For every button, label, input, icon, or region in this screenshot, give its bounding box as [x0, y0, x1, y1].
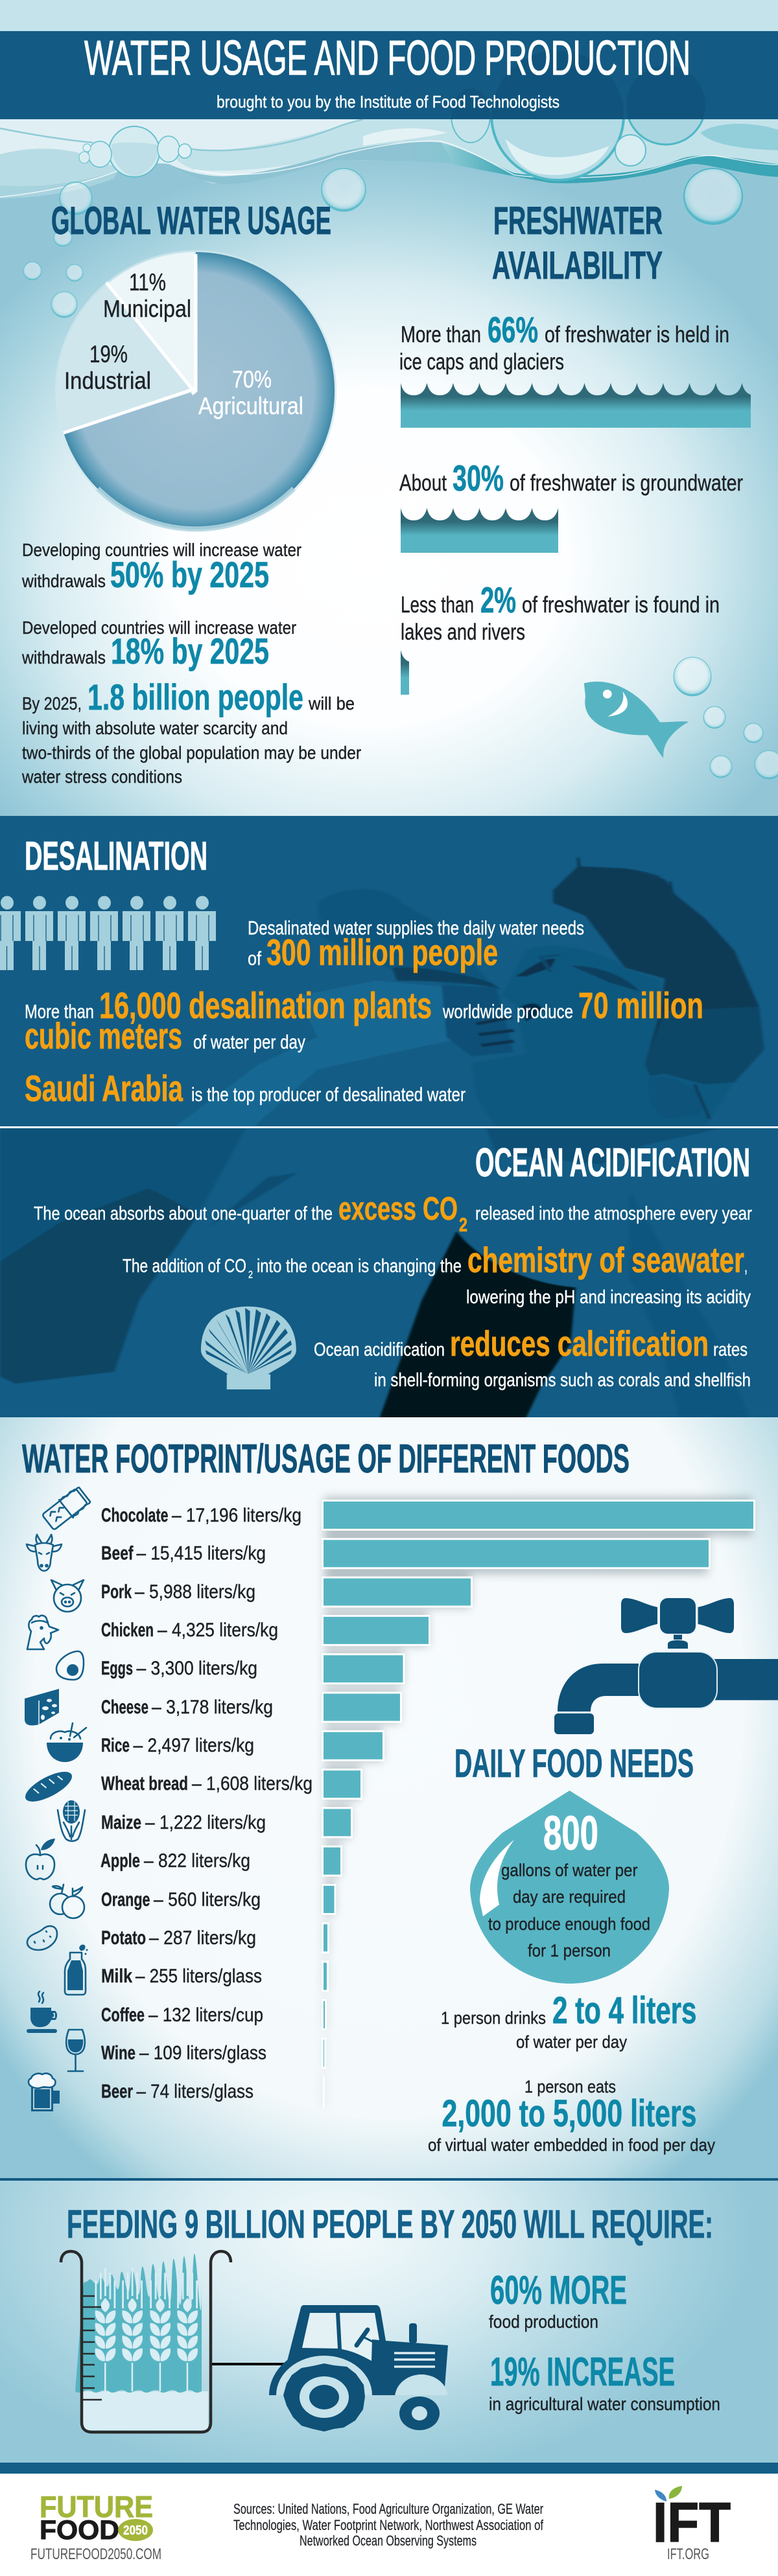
text: reduces calcification: Ocean acidification — [314, 1340, 445, 1360]
row: coffee — [27, 1991, 263, 2033]
text: 1.8 billion people: two-thirds of the global population may be under — [22, 743, 361, 763]
icon: pig — [51, 1580, 84, 1612]
heading: freshwater availability: AVAILABILITY — [492, 244, 663, 287]
tractor front wheel — [399, 2396, 440, 2430]
row: eggs: Eggs — [101, 1658, 133, 1679]
row: chocolate — [41, 1485, 301, 1532]
icon: chocolate — [41, 1485, 91, 1532]
text: excess CO2: excess CO — [338, 1190, 458, 1227]
text: 19 percent increase: in agricultural water consumption — [489, 2394, 720, 2414]
tractor rear wheel — [283, 2363, 365, 2431]
row: coffee: Coffee — [101, 2004, 145, 2026]
callout text: to produce enough food — [488, 1914, 650, 1934]
text: 2 percent: Less than — [401, 592, 474, 618]
text: 2 percent — [401, 579, 720, 645]
wave bar: 2 percent — [401, 650, 409, 695]
row: rice: – 2,497 liters/kg — [134, 1735, 254, 1756]
row: cheese — [25, 1689, 273, 1725]
text: excess CO2: 2 — [459, 1214, 467, 1236]
row: chicken: Chicken — [101, 1619, 154, 1641]
text: 1.8 billion people: 1.8 billion people — [88, 677, 303, 717]
header band — [0, 31, 778, 119]
icon: beer mug — [29, 2073, 60, 2111]
text: reduces calcification: rates — [713, 1340, 748, 1360]
row: potato: – 287 liters/kg — [149, 1927, 256, 1949]
icon: fish — [584, 682, 689, 758]
row: beef — [27, 1535, 266, 1571]
icon: potato — [27, 1926, 57, 1950]
text: 16,000 desalination plants: worldwide produce — [442, 1001, 573, 1023]
row: milk: – 255 liters/glass — [136, 1966, 262, 1987]
row: wine: Wine — [101, 2043, 136, 2063]
icon: row of people — [0, 896, 216, 970]
text: chemistry of seawater: into the ocean is changing the — [257, 1256, 462, 1277]
row: pork: – 5,988 liters/kg — [135, 1581, 255, 1603]
icon: cheese — [25, 1689, 59, 1725]
text: saudi arabia: is the top producer of desalinated water — [191, 1084, 466, 1106]
icon: wine glass — [66, 2030, 85, 2071]
text: developed countries: Developed countries will increase water — [22, 618, 296, 638]
sources: Technologies, Water Footprint Network, Northwest Association of — [233, 2517, 544, 2533]
text: chemistry of seawater: 2 — [248, 1270, 253, 1281]
row: coffee: – 132 liters/cup — [148, 2004, 263, 2026]
callout text: for 1 person — [528, 1941, 611, 1960]
row: eggs — [56, 1651, 257, 1680]
text: saudi arabia: Saudi Arabia — [25, 1068, 183, 1109]
text: chemistry of seawater: The addition of CO — [123, 1256, 246, 1277]
text: 300 million people: Desalinated water supplies the daily water needs — [248, 918, 584, 939]
callout number: 800 — [543, 1806, 598, 1860]
text: 16,000 desalination plants: 16,000 desalination plants — [99, 985, 432, 1027]
row: beer: Beer — [101, 2081, 133, 2102]
text: 66 percent: More than — [401, 322, 481, 347]
text: 2,000 to 5,000 liters — [428, 2077, 715, 2155]
row: maize: Maize — [101, 1812, 141, 1833]
text: 2 to 4 liters — [441, 1990, 696, 2052]
row: maize: – 1,222 liters/kg — [145, 1812, 266, 1833]
bubbles — [23, 51, 778, 779]
text: 1.8 billion people: By 2025, — [22, 693, 82, 714]
text: 300 million people: 300 million people — [266, 932, 498, 973]
text: 2 percent: lakes and rivers — [401, 620, 525, 645]
label: agricultural — [198, 366, 303, 419]
row: chocolate: Chocolate — [101, 1505, 169, 1526]
row: wheat bread: – 1,608 liters/kg — [192, 1773, 312, 1794]
text: excess CO2: The ocean absorbs about one-quarter of the — [34, 1203, 333, 1224]
label: industrial — [64, 341, 151, 394]
row: rice — [47, 1723, 254, 1762]
text: developing countries: Developing countries will increase water — [22, 540, 301, 560]
row: orange: – 560 liters/kg — [154, 1889, 261, 1910]
icon: bread — [21, 1766, 76, 1807]
panel: water footprint and daily food needs — [0, 1417, 778, 2178]
text: 19 percent increase — [489, 2350, 720, 2414]
logo: future food 2050: 2050 — [123, 2524, 148, 2538]
callout text: gallons of water per — [501, 1861, 638, 1880]
icon: rice bowl — [47, 1723, 86, 1762]
row: wheat bread: Wheat bread — [101, 1773, 188, 1794]
photo: man drinking from a bottle — [174, 857, 764, 1128]
icon: scallop shell — [201, 1306, 296, 1389]
heading: desalination: DESALINATION — [25, 834, 207, 879]
logo: IFT: IFT — [653, 2492, 731, 2554]
text: 1.8 billion people: water stress conditions — [21, 767, 182, 787]
row: milk — [65, 1945, 262, 1995]
row: beef: Beef — [101, 1542, 134, 1564]
row: chicken: – 4,325 liters/kg — [158, 1619, 278, 1641]
text: 16,000 desalination plants: More than — [25, 1001, 94, 1023]
icon: oranges — [50, 1885, 84, 1918]
row: maize — [58, 1800, 266, 1841]
text: chemistry of seawater: , — [744, 1256, 748, 1277]
row: beer — [29, 2073, 253, 2111]
pie chart — [55, 250, 336, 531]
text: developed countries: withdrawals — [21, 647, 106, 667]
row: pork: Pork — [101, 1581, 132, 1603]
text: 66 percent: ice caps and glaciers — [399, 349, 564, 375]
text: 1.8 billion people: living with absolute water scarcity and — [22, 718, 288, 738]
row: potato: Potato — [101, 1927, 146, 1949]
bar chart: water footprint — [323, 1497, 755, 2107]
callout text — [488, 1861, 650, 1960]
text: 16,000 desalination plants — [25, 985, 703, 1057]
label: municipal: Municipal — [103, 296, 191, 322]
row: eggs: – 3,300 liters/kg — [136, 1658, 257, 1679]
heading: freshwater availability: FRESHWATER — [493, 199, 663, 242]
text: 2 percent: 2% — [480, 579, 516, 620]
sources: Sources: United Nations, Food Agriculture Organization, GE Water — [233, 2501, 543, 2517]
sources: Networked Ocean Observing Systems — [300, 2533, 477, 2549]
row: apple: – 822 liters/kg — [144, 1850, 250, 1872]
text: developed countries — [21, 618, 296, 671]
heading: global water usage: GLOBAL WATER USAGE — [51, 199, 331, 242]
text: 2 to 4 liters: 1 person drinks — [441, 2008, 546, 2028]
row: rice: Rice — [101, 1735, 130, 1756]
row: chocolate: – 17,196 liters/kg — [172, 1505, 301, 1526]
row: orange: Orange — [101, 1889, 150, 1910]
text: 2,000 to 5,000 liters: 2,000 to 5,000 liters — [442, 2093, 696, 2135]
text: 2,000 to 5,000 liters: of virtual water embedded in food per day — [428, 2135, 715, 2155]
label: industrial: Industrial — [64, 367, 151, 394]
text: 2 to 4 liters: 2 to 4 liters — [552, 1990, 696, 2032]
label: industrial: 19% — [89, 341, 128, 367]
callout text: day are required — [513, 1887, 626, 1907]
panel: ocean acidification — [0, 1128, 778, 1418]
logo: future food 2050: FUTUREFOOD2050.COM — [30, 2546, 161, 2563]
icon: coffee cup — [27, 1991, 57, 2033]
text: 2 percent: of freshwater is found in — [522, 592, 720, 618]
icon: tractor — [269, 2305, 448, 2443]
icon: faucet — [554, 1598, 778, 1734]
text: 300 million people — [248, 918, 584, 973]
row: cheese: – 3,178 liters/kg — [152, 1697, 273, 1718]
wave banner — [0, 119, 778, 198]
row: cheese: Cheese — [101, 1697, 148, 1718]
connector line — [212, 2363, 287, 2365]
text: 60 percent more: food production — [489, 2312, 598, 2332]
text: developing countries — [21, 540, 301, 595]
logo: IFT: IFT.ORG — [667, 2546, 709, 2563]
row: beef: – 15,415 liters/kg — [136, 1542, 266, 1564]
icon: cow — [27, 1535, 62, 1571]
text: developed countries: 18% by 2025 — [111, 631, 269, 671]
text: 66 percent: of freshwater is held in — [545, 322, 729, 347]
text: developing countries: 50% by 2025 — [110, 554, 269, 595]
text: chemistry of seawater — [123, 1240, 751, 1308]
photo: draped background — [0, 1129, 749, 1418]
row: potato — [27, 1926, 256, 1950]
panel: feeding 9 billion people — [0, 2181, 778, 2463]
logo: future food 2050: FOOD — [40, 2514, 119, 2545]
row: wine: – 109 liters/glass — [139, 2043, 266, 2063]
text: reduces calcification — [314, 1323, 751, 1391]
text: 2,000 to 5,000 liters: 1 person eats — [525, 2077, 616, 2096]
text: 16,000 desalination plants: of water per day — [193, 1032, 305, 1053]
text: 60 percent more: 60% MORE — [490, 2268, 627, 2313]
text: 300 million people: of — [248, 948, 262, 969]
water drop callout — [470, 1791, 669, 1984]
text: 16,000 desalination plants: cubic meters — [25, 1015, 182, 1057]
icon: milk bottle — [65, 1945, 88, 1995]
label: municipal: 11% — [129, 269, 166, 296]
text: 1.8 billion people — [21, 677, 361, 787]
text: 16,000 desalination plants: 70 million — [578, 985, 703, 1027]
text: 30 percent — [399, 458, 743, 498]
row: orange — [50, 1885, 261, 1918]
wave bar: 30 percent — [401, 508, 558, 553]
text: 66 percent — [399, 309, 729, 375]
row: apple: Apple — [100, 1850, 140, 1872]
text: saudi arabia — [25, 1068, 466, 1109]
row: chicken — [27, 1616, 278, 1649]
text: 2 to 4 liters: of water per day — [516, 2032, 627, 2052]
text: 60 percent more — [489, 2268, 627, 2332]
icon: egg — [56, 1651, 84, 1680]
wave bar: 66 percent — [401, 383, 768, 428]
row: milk: Milk — [101, 1966, 132, 1987]
panel: global water usage and freshwater availability — [0, 0, 778, 816]
row: wheat bread — [21, 1766, 312, 1807]
heading: freshwater availability — [492, 199, 663, 287]
icon: beaker with wheat — [61, 2251, 231, 2432]
text: 30 percent: 30% — [453, 458, 504, 498]
text: developing countries: withdrawals — [21, 571, 106, 591]
panel: desalination — [0, 816, 778, 1128]
row: apple — [26, 1839, 250, 1879]
bar: shadows — [323, 1497, 752, 2107]
text: 66 percent: 66% — [488, 309, 538, 350]
sources — [233, 2501, 544, 2549]
text: excess CO2 — [34, 1190, 752, 1236]
footer — [0, 2474, 778, 2576]
text: 1.8 billion people: will be — [308, 693, 355, 714]
row: wine — [66, 2030, 266, 2071]
row: pork — [51, 1580, 255, 1612]
logo: future food 2050 — [30, 2490, 161, 2563]
label: agricultural: 70% — [232, 366, 272, 393]
icon: chicken — [27, 1616, 58, 1649]
text: 30 percent: About — [399, 470, 447, 496]
row: beer: – 74 liters/glass — [136, 2081, 253, 2102]
logo: future food 2050: FUTURE — [40, 2490, 153, 2524]
subtitle: brought to you by the Institute of Food Technologists — [217, 92, 560, 111]
label: municipal — [103, 269, 191, 322]
icon: apple — [26, 1839, 55, 1879]
label: agricultural: Agricultural — [198, 393, 303, 419]
icon: maize — [58, 1800, 85, 1841]
